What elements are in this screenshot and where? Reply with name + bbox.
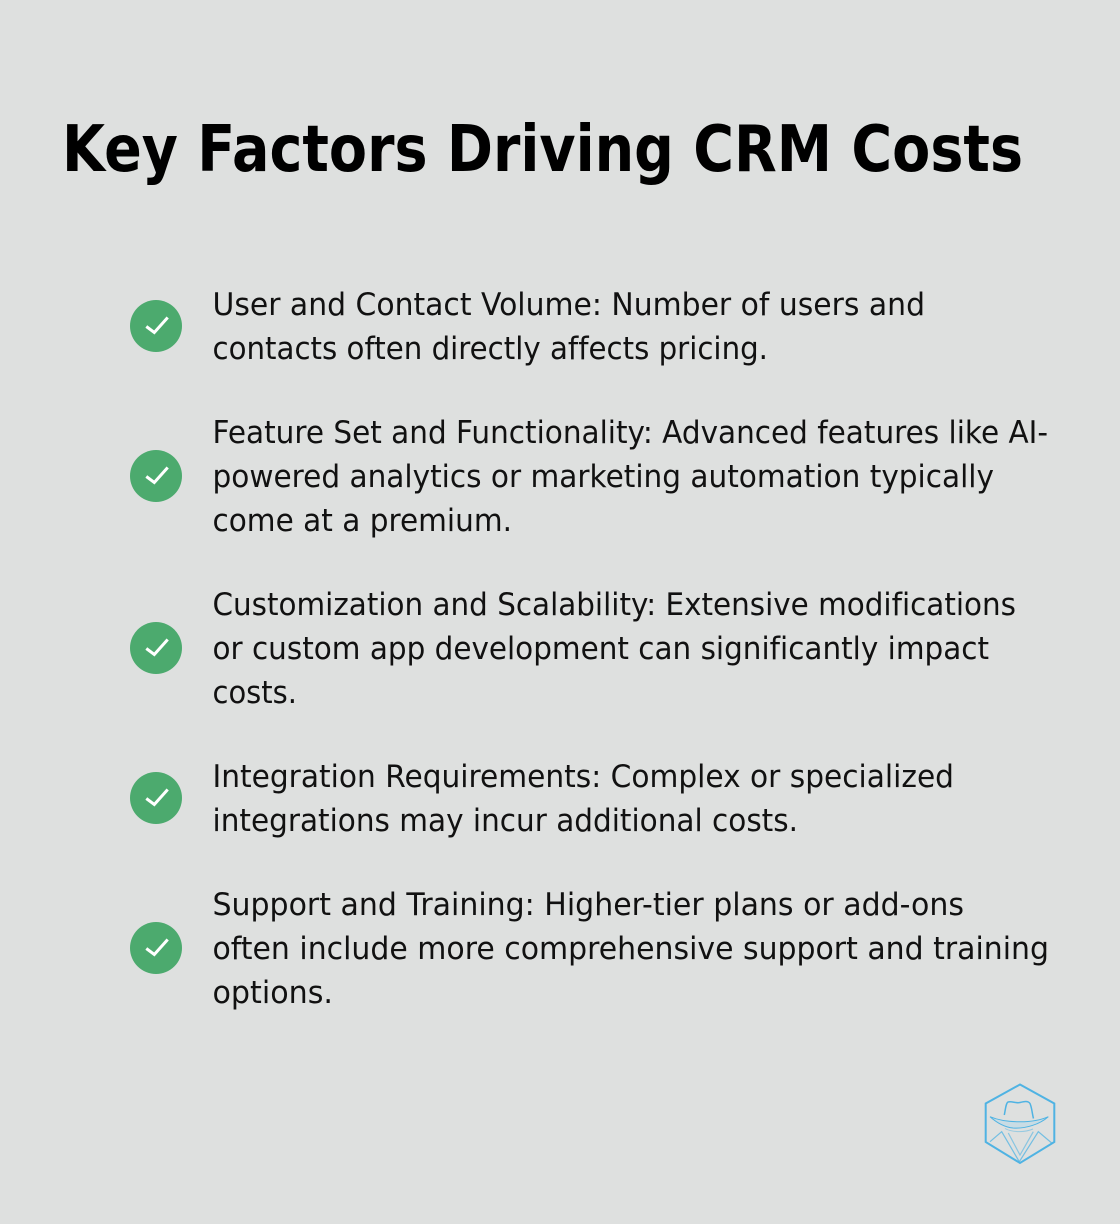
text: item 4: [212, 759, 954, 839]
icon: hexagon logo with hat: [986, 1084, 1054, 1163]
list item 2: feature set and functionality: [130, 415, 1048, 539]
text: item 5: often include more comprehensive support and training: [212, 931, 1049, 967]
icon: check 2: [130, 450, 182, 502]
icon: check 1: [130, 300, 182, 352]
text: item 1: [212, 287, 925, 367]
text: item 3: Customization and Scalability: Extensive modifications: [212, 587, 1016, 623]
text: item 2: Feature Set and Functionality: Advanced features like AI-: [212, 415, 1048, 451]
text: item 2: [212, 415, 1048, 539]
text: item 4: Integration Requirements: Complex or specialized: [212, 759, 954, 795]
text: item 5: [212, 887, 1049, 1011]
text: item 3: [212, 587, 1016, 711]
list item 5: support and training: [130, 887, 1049, 1011]
text: item 5: Support and Training: Higher-tier plans or add-ons: [212, 887, 964, 923]
text: item 5: options.: [212, 975, 333, 1011]
text: item 2: powered analytics or marketing automation typically: [212, 459, 994, 495]
list item 1: user and contact volume: [130, 287, 925, 367]
text: item 1: contacts often directly affects pricing.: [212, 331, 768, 367]
icon: check 3: [130, 622, 182, 674]
list item 4: integration requirements: [130, 759, 954, 839]
icon: check 5: [130, 922, 182, 974]
text: item 3: costs.: [212, 675, 297, 711]
icon: check 4: [130, 772, 182, 824]
text: item 2: come at a premium.: [212, 503, 512, 539]
list item 3: customization and scalability: [130, 587, 1016, 711]
text: item 4: integrations may incur additional costs.: [212, 803, 798, 839]
text: item 3: or custom app development can significantly impact: [212, 631, 989, 667]
text: item 1: User and Contact Volume: Number of users and: [212, 287, 925, 323]
